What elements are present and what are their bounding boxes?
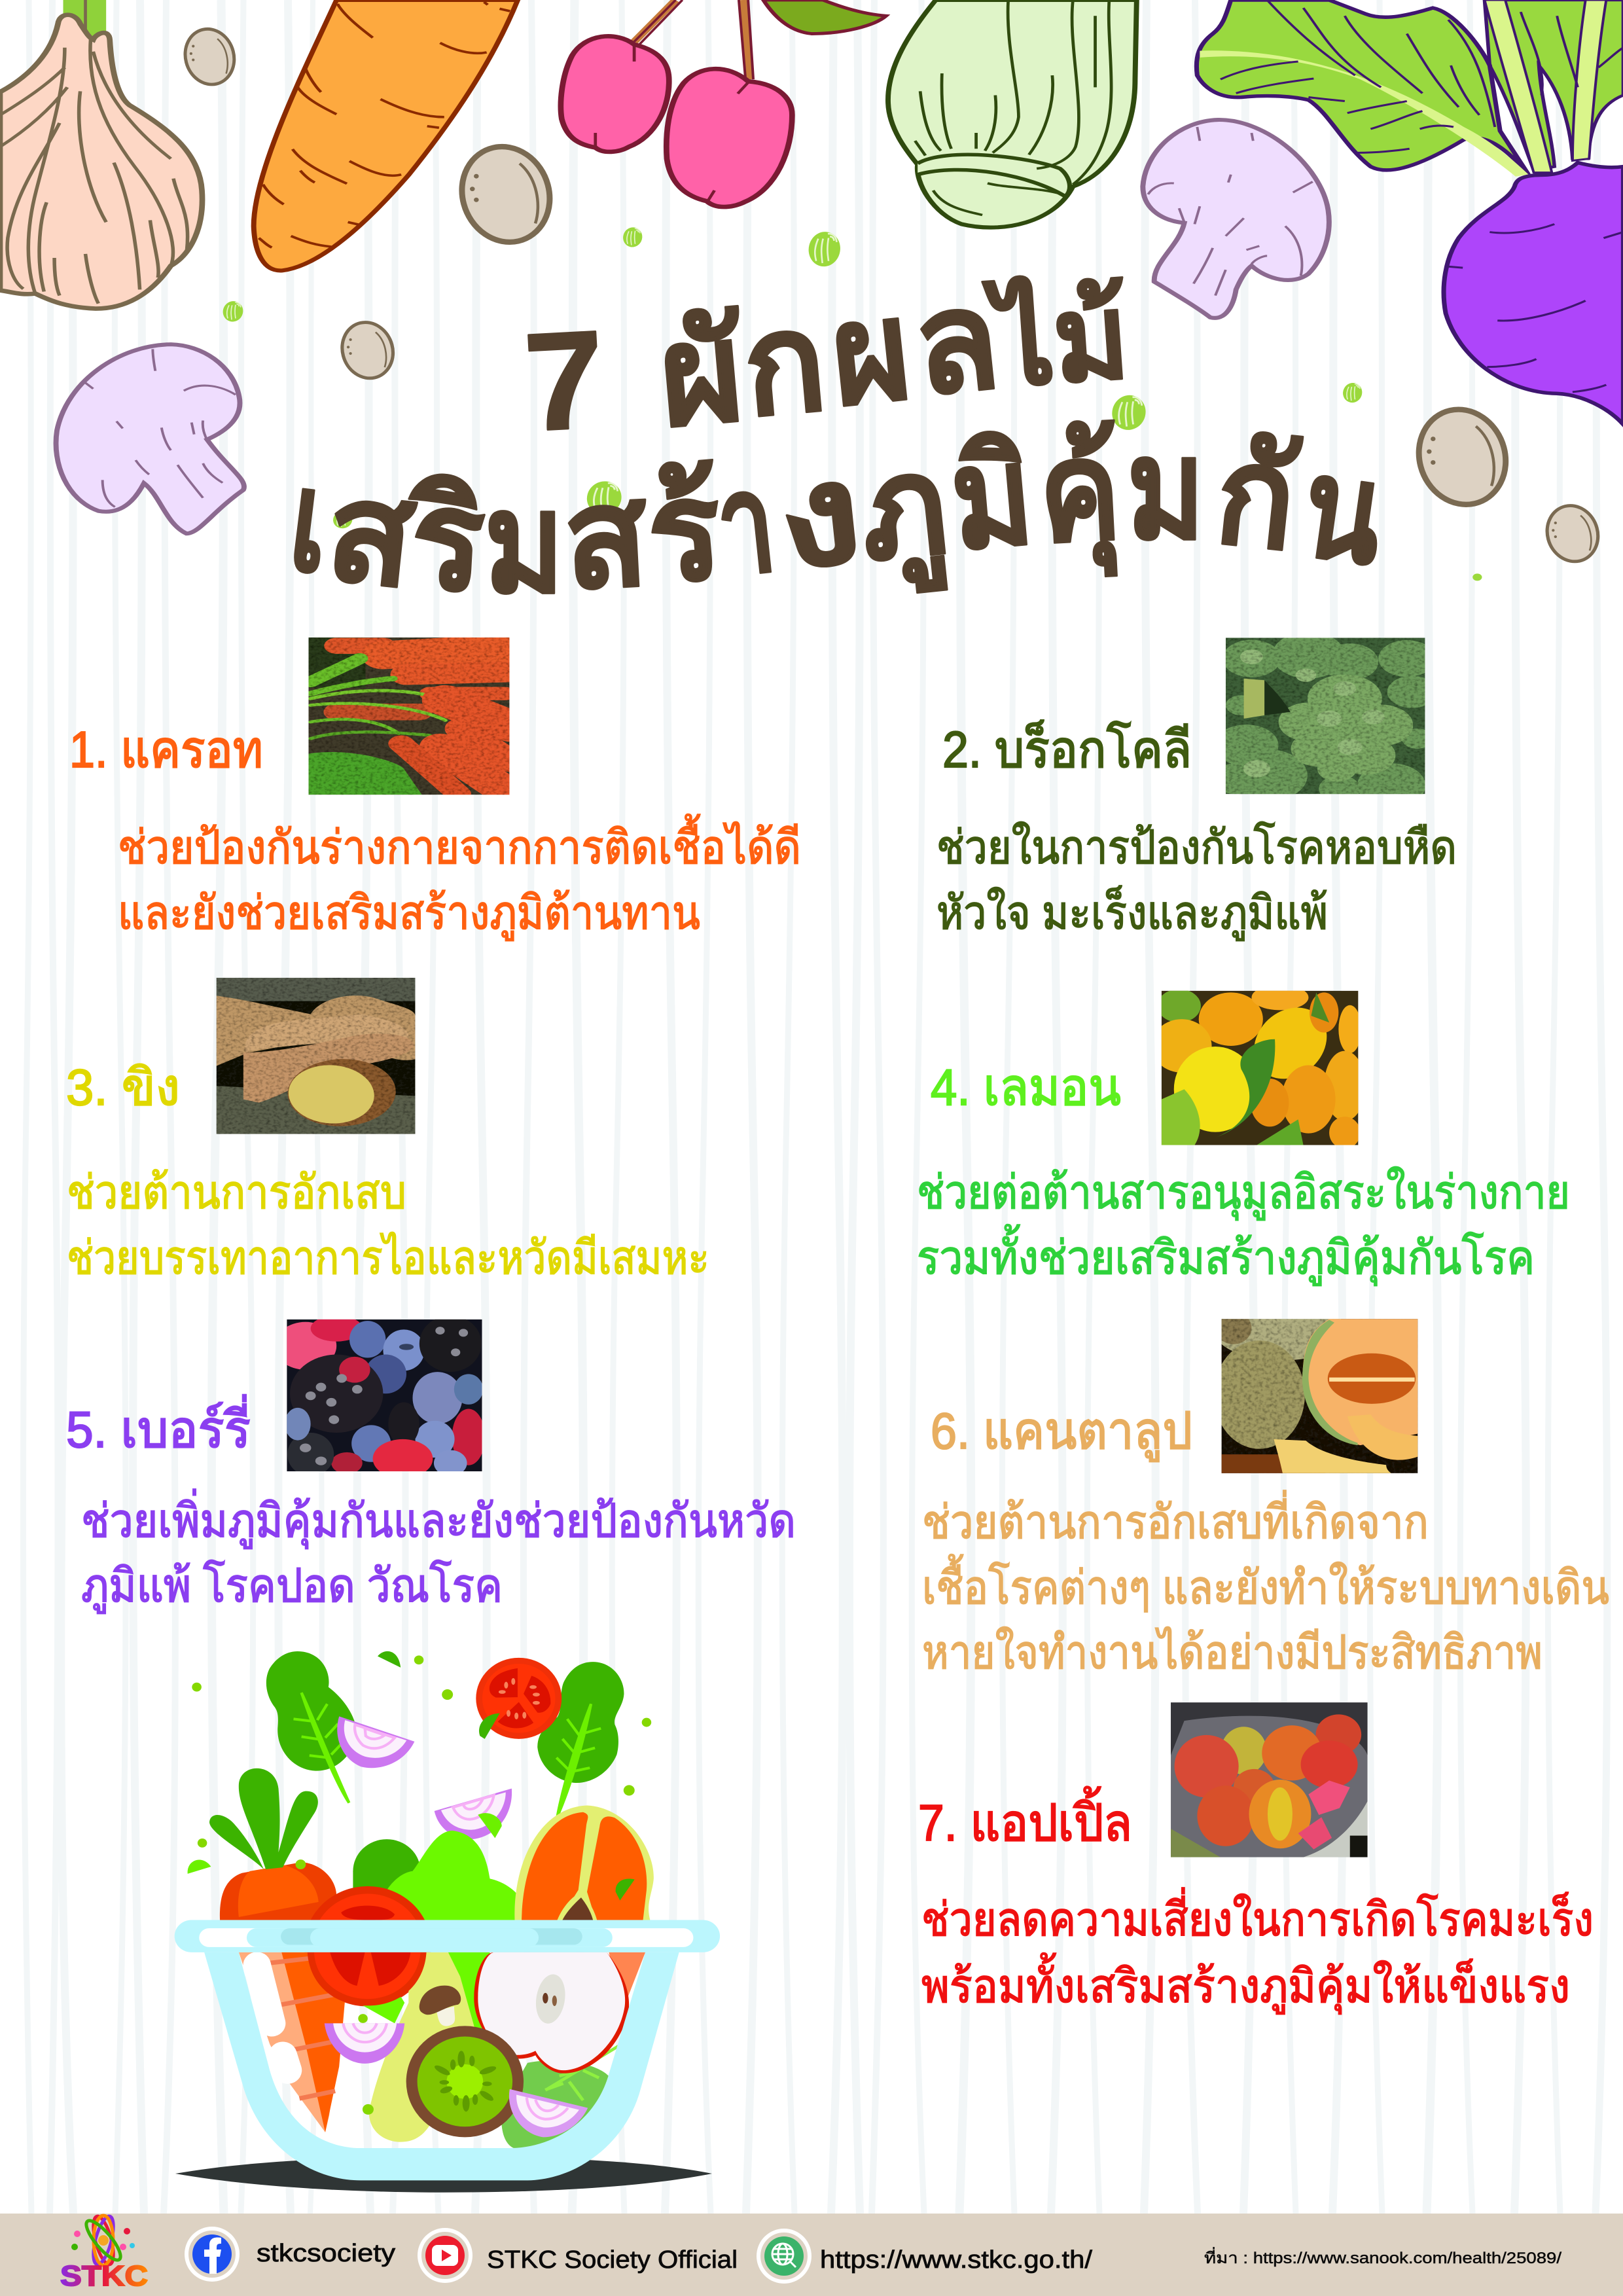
title line 2: กั <box>1209 416 1304 578</box>
title line 2: ส <box>560 458 652 617</box>
illustrations: top left vegetables <box>0 0 792 533</box>
title line 2: น <box>1294 429 1393 593</box>
icon: green peas left <box>221 225 645 530</box>
icon: youtube <box>419 2230 471 2281</box>
title line 1: ก <box>738 283 831 444</box>
illustration: salad bowl <box>175 1651 720 2193</box>
title line 2: ม <box>484 465 564 620</box>
photo group: left column top <box>217 637 512 1136</box>
title line 1 <box>521 260 1133 460</box>
icon: bok choy <box>888 0 1137 228</box>
panel: item 3 ginger <box>66 1058 709 1284</box>
title line 2: ง <box>771 435 868 598</box>
text block <box>921 1888 1594 2015</box>
title line 1: ล <box>907 260 1006 423</box>
title line 2: ภู <box>853 425 955 598</box>
photo: lemons <box>1161 991 1359 1145</box>
footer band <box>0 2214 1623 2296</box>
text block <box>922 1490 1609 1679</box>
icon: cherries <box>561 0 792 207</box>
icon: pebbles left <box>179 24 560 384</box>
panel: item 2 broccoli <box>936 720 1457 941</box>
text block <box>118 814 801 941</box>
vegetables inside bowl <box>239 1952 645 2148</box>
photo: ginger <box>217 978 415 1136</box>
text block <box>81 1489 796 1614</box>
title line 2 <box>283 412 1393 620</box>
flying leaves and tomato <box>188 1651 624 1874</box>
panel: item 7 apple <box>918 1786 1594 2015</box>
icon: carrot <box>254 0 518 270</box>
social label: facebook: stkcsociety <box>257 2240 395 2267</box>
photo group: berries <box>287 1319 482 1471</box>
text block: ช่วยในการป้องกันโรคหอบหืด <box>936 821 1457 874</box>
text block: พร้อมทั้งเสริมสร้างภูมิคุ้มให้แข็งแรง <box>921 1952 1570 2015</box>
heading: 5. เบอร์รี่ <box>66 1395 251 1458</box>
text block: หายใจทำงานได้อย่างมีประสิทธิภาพ <box>922 1626 1543 1679</box>
text block: ช่วยต้านการอักเสบที่เกิดจาก <box>922 1490 1429 1549</box>
icon: cherry leaf <box>763 0 886 34</box>
photo: apples <box>1171 1702 1368 1857</box>
title line 2: มิ <box>945 416 1039 578</box>
text block: และยังช่วยเสริมสร้างภูมิต้านทาน <box>118 888 700 941</box>
title <box>283 260 1393 620</box>
heading: 1. แครอท <box>69 721 263 778</box>
title line 1: 7 <box>521 301 608 460</box>
social label: youtube: STKC Society Official <box>487 2246 738 2274</box>
glass bowl <box>175 1920 720 2180</box>
icon: pebbles right <box>1408 401 1604 567</box>
text block: ภูมิแพ้ โรคปอด วัณโรค <box>81 1559 503 1614</box>
title line 2: คุ้ <box>1035 412 1124 580</box>
heading: 3. ขิง <box>66 1058 180 1116</box>
icon: garlic <box>0 0 202 309</box>
photo: berries <box>274 1316 485 1479</box>
title line 2: ริ <box>402 461 488 620</box>
icon: website <box>758 2231 810 2282</box>
text block: ช่วยต้านการอักเสบ <box>67 1167 406 1219</box>
text block: หัวใจ มะเร็งและภูมิแพ้ <box>936 886 1328 941</box>
text block <box>67 1167 709 1284</box>
heading: 7. แอปเปิ้ล <box>918 1786 1132 1852</box>
onion slices <box>337 1716 512 1839</box>
photo: broccoli <box>1225 637 1425 795</box>
text block <box>936 821 1457 941</box>
photo: carrots <box>308 637 512 795</box>
text block <box>917 1166 1570 1286</box>
bowl shadow <box>175 2156 712 2193</box>
illustrations: top right vegetables <box>763 0 1623 581</box>
icon: large mushroom right <box>1143 120 1329 318</box>
logo: STKC <box>60 2214 148 2292</box>
icon: small mushroom left <box>56 344 244 533</box>
text block: รวมทั้งช่วยเสริมสร้างภูมิคุ้มกันโรค <box>917 1224 1535 1286</box>
vegetables above rim <box>209 1768 654 2007</box>
social label: website: https://www.stkc.go.th/ <box>820 2246 1092 2274</box>
text block: ช่วยป้องกันร่างกายจากการติดเชื้อได้ดี <box>118 814 801 874</box>
title line 2: ม <box>1127 412 1205 567</box>
title line 1: ผ <box>824 272 918 434</box>
title line 2: ส <box>320 452 422 616</box>
text block: ช่วยบรรเทาอาการไอและหวัดมีเสมหะ <box>67 1231 709 1284</box>
logo: STKC: STKC <box>60 2260 148 2292</box>
panel: item 5 berries <box>66 1395 796 1614</box>
text block: ช่วยเพิ่มภูมิคุ้มกันและยังช่วยป้องกันหวัด <box>81 1489 796 1549</box>
title line 1: ไม้ <box>982 268 1133 412</box>
title line 1: ผั <box>653 293 750 455</box>
heading: 6. แคนตาลูป <box>931 1402 1192 1462</box>
photo group: right column top <box>1152 632 1437 1149</box>
title line 2: เ <box>283 442 338 601</box>
icon: green peas right <box>805 228 1482 581</box>
panel: item 1 carrot <box>69 721 801 941</box>
title line 2: า <box>710 444 781 604</box>
icon: facebook <box>187 2229 238 2280</box>
source credit: ที่มา : https://www.sanook.com/health/25089/ <box>1204 2247 1561 2267</box>
heading: 2. บร็อกโคลี <box>942 720 1192 778</box>
panel: item 4 lemon <box>917 1058 1570 1286</box>
photo group: melon and apples <box>1171 1305 1418 1857</box>
green bits <box>192 1655 651 2115</box>
title line 2: ร้ <box>641 451 727 612</box>
icon: purple beet with leaves <box>1196 0 1623 425</box>
panel: item 6 cantaloupe <box>922 1402 1609 1679</box>
photo: cantaloupe <box>1214 1305 1418 1473</box>
heading: 4. เลมอน <box>931 1058 1121 1116</box>
